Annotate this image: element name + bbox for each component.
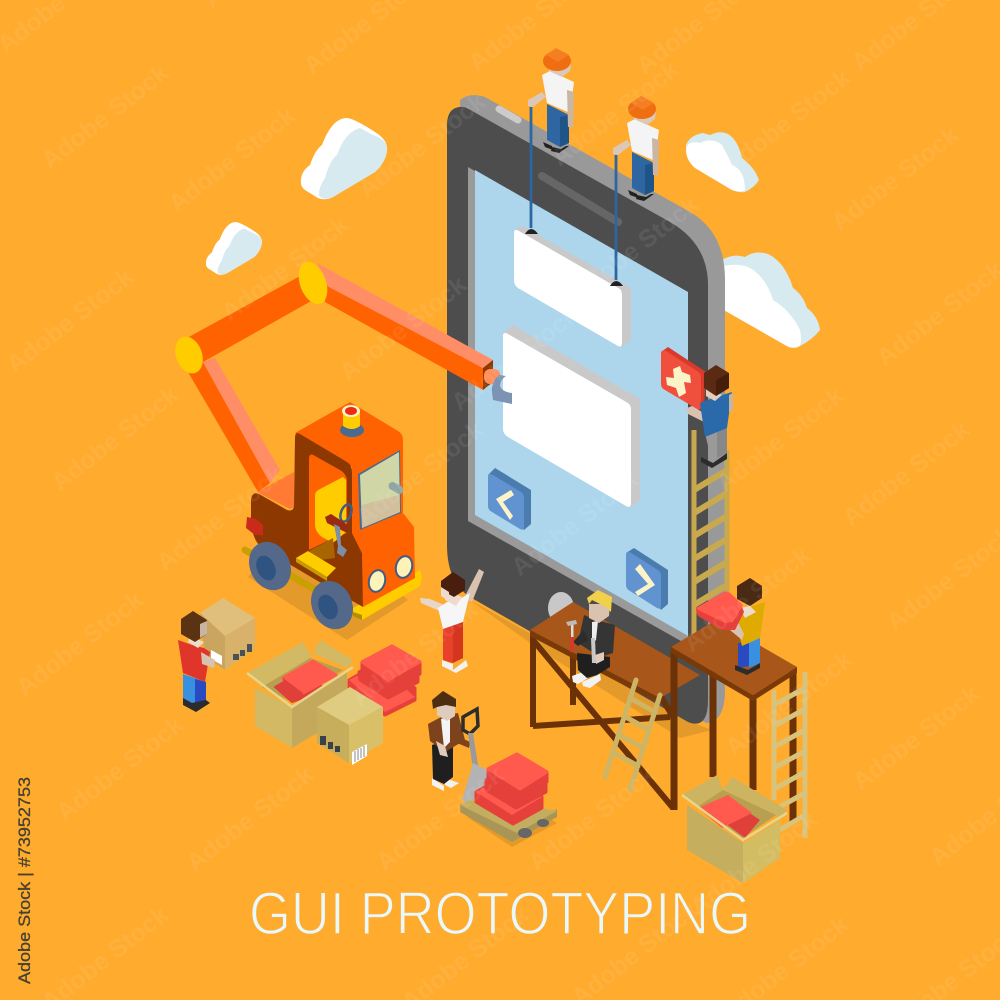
repeating watermark: Adobe Stock xyxy=(351,416,489,532)
windshield xyxy=(358,450,405,530)
rope xyxy=(610,155,623,286)
repeating watermark: Adobe Stock xyxy=(216,211,354,327)
home button xyxy=(548,592,574,624)
repeating watermark: Adobe Stock xyxy=(446,301,584,417)
cushions inside box xyxy=(698,795,760,838)
repeating watermark: Adobe Stock xyxy=(566,191,704,307)
cab body xyxy=(295,402,415,607)
worker on top of phone: right xyxy=(610,96,659,286)
repeating watermark: Adobe Stock xyxy=(46,381,184,497)
warning beacon xyxy=(340,405,364,437)
steering wheel and lever xyxy=(325,503,354,557)
worker with raised arm: white shirt, red trousers xyxy=(420,569,484,673)
pallet jack xyxy=(460,709,557,847)
worker with yellow shirt holding cushion xyxy=(696,578,765,675)
repeating watermark: Adobe Stock xyxy=(353,88,491,204)
ladder leaning on right table xyxy=(774,672,805,838)
repeating watermark: Adobe Stock xyxy=(11,586,149,702)
cab doorway xyxy=(296,455,347,581)
handling icons xyxy=(320,736,340,752)
repeating watermark: Adobe Stock xyxy=(163,102,301,218)
repeating watermark: Adobe Stock xyxy=(151,461,289,577)
cloud: large right behind phone xyxy=(715,253,820,348)
leaning ladder xyxy=(605,680,660,790)
scaffold table: left xyxy=(530,602,700,808)
repeating watermark: Adobe Stock xyxy=(718,64,856,180)
stack of red cushions xyxy=(349,646,420,715)
headlights xyxy=(365,553,416,595)
repeating watermark: Adobe Stock xyxy=(720,646,858,762)
cloud: upper right xyxy=(686,132,759,192)
ladder against phone xyxy=(694,430,727,641)
cushions inside box xyxy=(275,661,336,702)
icon: forward arrow button xyxy=(626,548,668,610)
repeating watermark: Adobe Stock xyxy=(1,263,139,379)
repeating watermark: Adobe Stock xyxy=(506,466,644,582)
repeating watermark: Adobe Stock xyxy=(826,121,964,237)
repeating watermark: Adobe Stock xyxy=(334,271,472,387)
phone screen xyxy=(468,167,688,645)
forklift xyxy=(241,402,422,640)
cloud: small left xyxy=(206,222,262,275)
chassis bars xyxy=(245,550,422,620)
worker on ladder: blue shirt xyxy=(687,365,733,468)
repeating watermark: Adobe Stock xyxy=(181,761,319,877)
repeating watermark: Adobe Stock xyxy=(685,806,823,922)
icon: red close button xyxy=(661,347,706,410)
repeating watermark: Adobe Stock xyxy=(711,382,849,498)
repeating watermark: Adobe Stock xyxy=(36,59,174,175)
pallet xyxy=(460,804,557,842)
closed cardboard box xyxy=(317,687,383,765)
rope xyxy=(525,107,538,234)
crane arm xyxy=(170,258,512,492)
icon: back arrow button xyxy=(488,468,531,530)
pallet shadow xyxy=(467,800,557,847)
smartphone xyxy=(447,95,725,738)
title: GUI PROTOTYPING xyxy=(249,880,751,947)
repeating watermark: Adobe Stock xyxy=(346,596,484,712)
UI panel: large card xyxy=(503,325,640,508)
handling icons xyxy=(233,644,252,660)
watermark credit line: Adobe Stock | #73952753 xyxy=(15,777,34,984)
repeating watermark: Adobe Stock xyxy=(51,711,189,827)
repeating watermark: Adobe Stock xyxy=(678,542,816,658)
handle xyxy=(463,709,478,734)
worker on top of phone: left xyxy=(525,48,574,234)
earpiece and top button xyxy=(499,109,618,222)
cloud: upper left xyxy=(301,118,387,199)
repeating watermark: Adobe Stock xyxy=(847,680,985,796)
UI panel: hanging card xyxy=(514,226,631,347)
worker with red shirt carrying box xyxy=(178,598,255,712)
scaffold table: right xyxy=(671,620,797,823)
repeating watermark: Adobe Stock xyxy=(837,416,975,532)
open cardboard box: bottom right xyxy=(682,775,787,883)
repeating watermark: Adobe Stock xyxy=(523,761,661,877)
ground shadow xyxy=(248,550,408,640)
repeating watermark: Adobe Stock xyxy=(371,761,509,877)
carried box xyxy=(200,598,255,670)
front wheel xyxy=(303,574,361,636)
carried red cushion xyxy=(696,592,744,630)
stack of red cushions on pallet xyxy=(476,754,547,824)
worker with brown jacket pushing pallet jack xyxy=(428,691,470,791)
repeating watermark: Adobe Stock xyxy=(546,56,684,172)
rear deck xyxy=(257,472,294,509)
taillight xyxy=(246,517,263,535)
open cardboard box with cushions xyxy=(247,640,353,748)
seated businessman with hammer xyxy=(566,590,615,688)
rear wheel xyxy=(241,535,299,597)
